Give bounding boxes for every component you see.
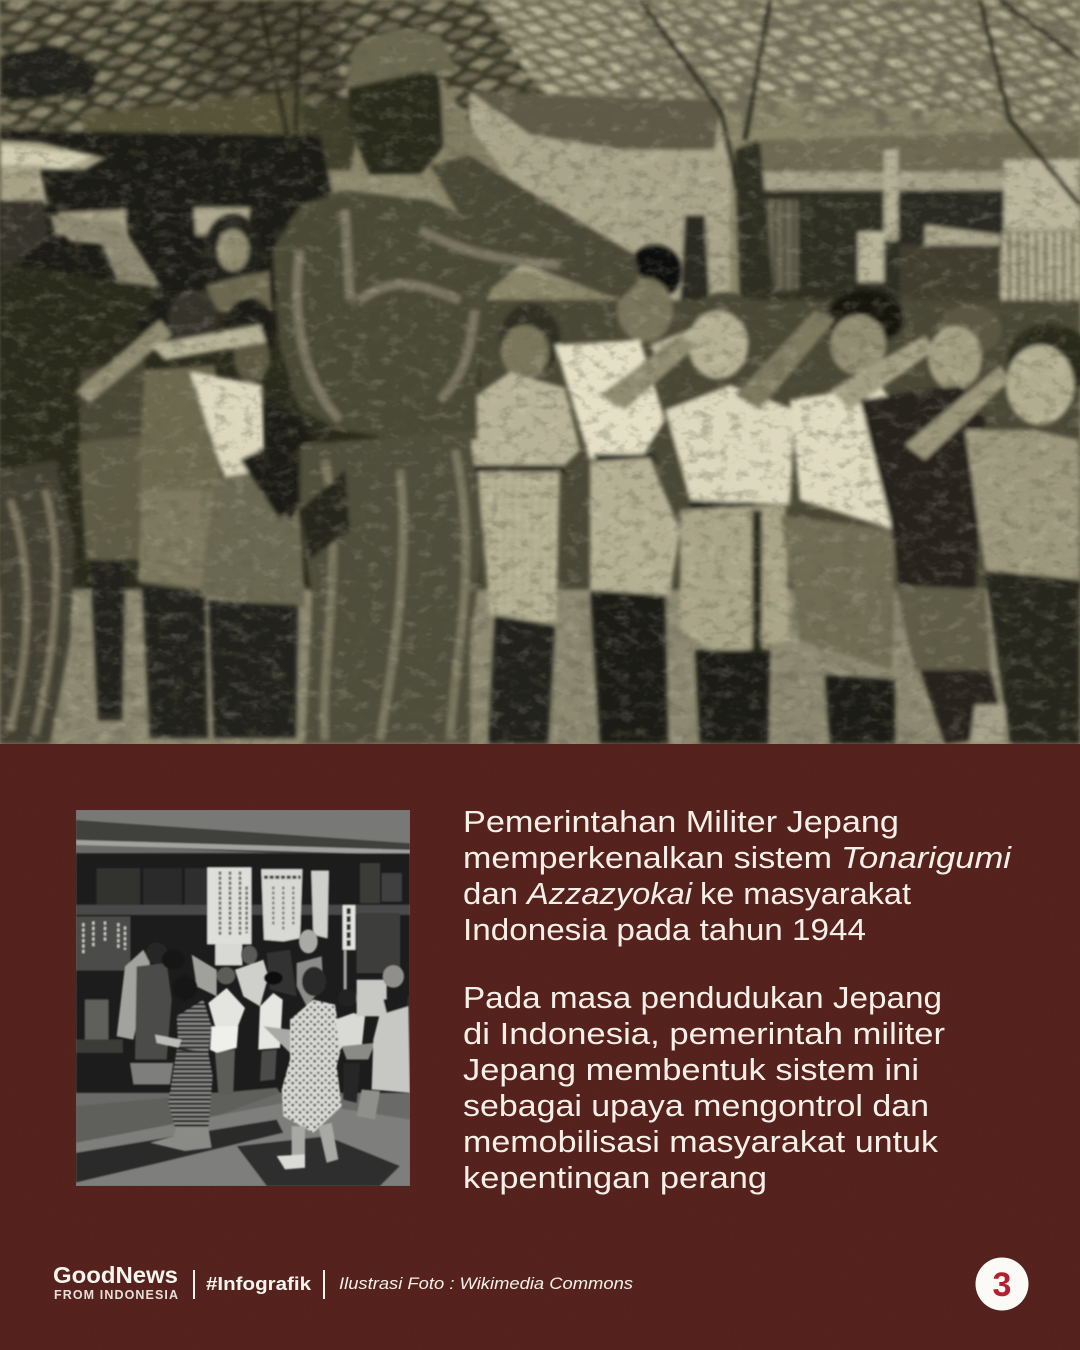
- posters: [207, 868, 251, 944]
- customers at counter: [117, 950, 150, 1040]
- text block: context paragraph: [463, 981, 945, 1195]
- footer logo: GoodNews from Indonesia: FROM INDONESIA: [54, 1288, 178, 1302]
- text block: intro paragraph: ke masyarakat: [700, 877, 912, 911]
- boy with basket: [264, 971, 283, 985]
- shop display: [85, 1000, 108, 1040]
- chalkboard: [76, 916, 130, 970]
- text block: context paragraph: kepentingan perang: [463, 1161, 767, 1195]
- footer credit: Ilustrasi Foto : Wikimedia Commons: [339, 1274, 634, 1293]
- background child: [137, 292, 213, 348]
- footer tag: #Infografik: #Infografik: [206, 1274, 312, 1294]
- right kid 3: [690, 292, 760, 352]
- right boy and woman: [338, 989, 357, 1007]
- footer divider one: [193, 1270, 195, 1299]
- right kid 6: [1008, 324, 1080, 396]
- branches: [260, 0, 1080, 220]
- text block: context paragraph: Jepang membentuk sistem ini: [463, 1053, 919, 1087]
- footer divider two: [323, 1270, 325, 1299]
- right kid 5: [938, 305, 1002, 355]
- shelter: [755, 130, 1080, 190]
- text block: intro paragraph: [463, 805, 1012, 947]
- footer logo: GoodNews from Indonesia: GoodNews: [53, 1262, 178, 1288]
- page number badge: [976, 1258, 1028, 1310]
- text block: intro paragraph: Tonarigumi: [841, 841, 1012, 875]
- dark under eaves: [0, 130, 345, 300]
- basket: [130, 1063, 173, 1085]
- left soldier: [0, 140, 105, 205]
- woman with headscarf: [299, 929, 318, 953]
- right roof: [480, 0, 1080, 125]
- text block: context paragraph: di Indonesia, pemerintah militer: [463, 1017, 945, 1051]
- text block: context paragraph: Pada masa pendudukan Jepang: [463, 981, 942, 1015]
- centre soldier: [345, 28, 458, 92]
- left child: [168, 290, 218, 346]
- text block: context paragraph: memobilisasi masyarakat untuk: [463, 1125, 939, 1159]
- boy in white: [217, 967, 235, 984]
- right kid 4: [827, 290, 903, 346]
- ground: [0, 590, 1080, 744]
- text block: intro paragraph: Azzazyokai: [525, 877, 693, 911]
- film mottling over the whole photo: [0, 0, 1080, 744]
- panel: text background: [0, 744, 1080, 1350]
- striped woman: [172, 975, 198, 1001]
- left roof: [0, 0, 560, 140]
- backdrop behind the children: [0, 300, 480, 600]
- pavement: [76, 1088, 280, 1146]
- footer logo: GoodNews from Indonesia: [53, 1262, 178, 1302]
- text block: intro paragraph: Pemerintahan Militer Jepang: [463, 805, 899, 839]
- right kid 2: [628, 245, 682, 299]
- text block: intro paragraph: Indonesia pada tahun 1944: [463, 913, 866, 947]
- plaster wall: [470, 92, 730, 300]
- woman in floral dress: [302, 967, 326, 996]
- woman behind: [205, 214, 261, 286]
- text block: intro paragraph: dan: [463, 877, 518, 911]
- page number badge: 3: [993, 1266, 1011, 1304]
- second child: [224, 298, 276, 362]
- photo: soldiers and saluting children: [0, 0, 1080, 744]
- shopkeeper: [241, 945, 257, 964]
- text block: intro paragraph: memperkenalkan sistem: [463, 841, 832, 875]
- photo: queue in front of Japanese shop: [76, 810, 410, 1186]
- text block: context paragraph: sebagai upaya mengontrol dan: [463, 1089, 929, 1123]
- right kid 1: [500, 304, 560, 376]
